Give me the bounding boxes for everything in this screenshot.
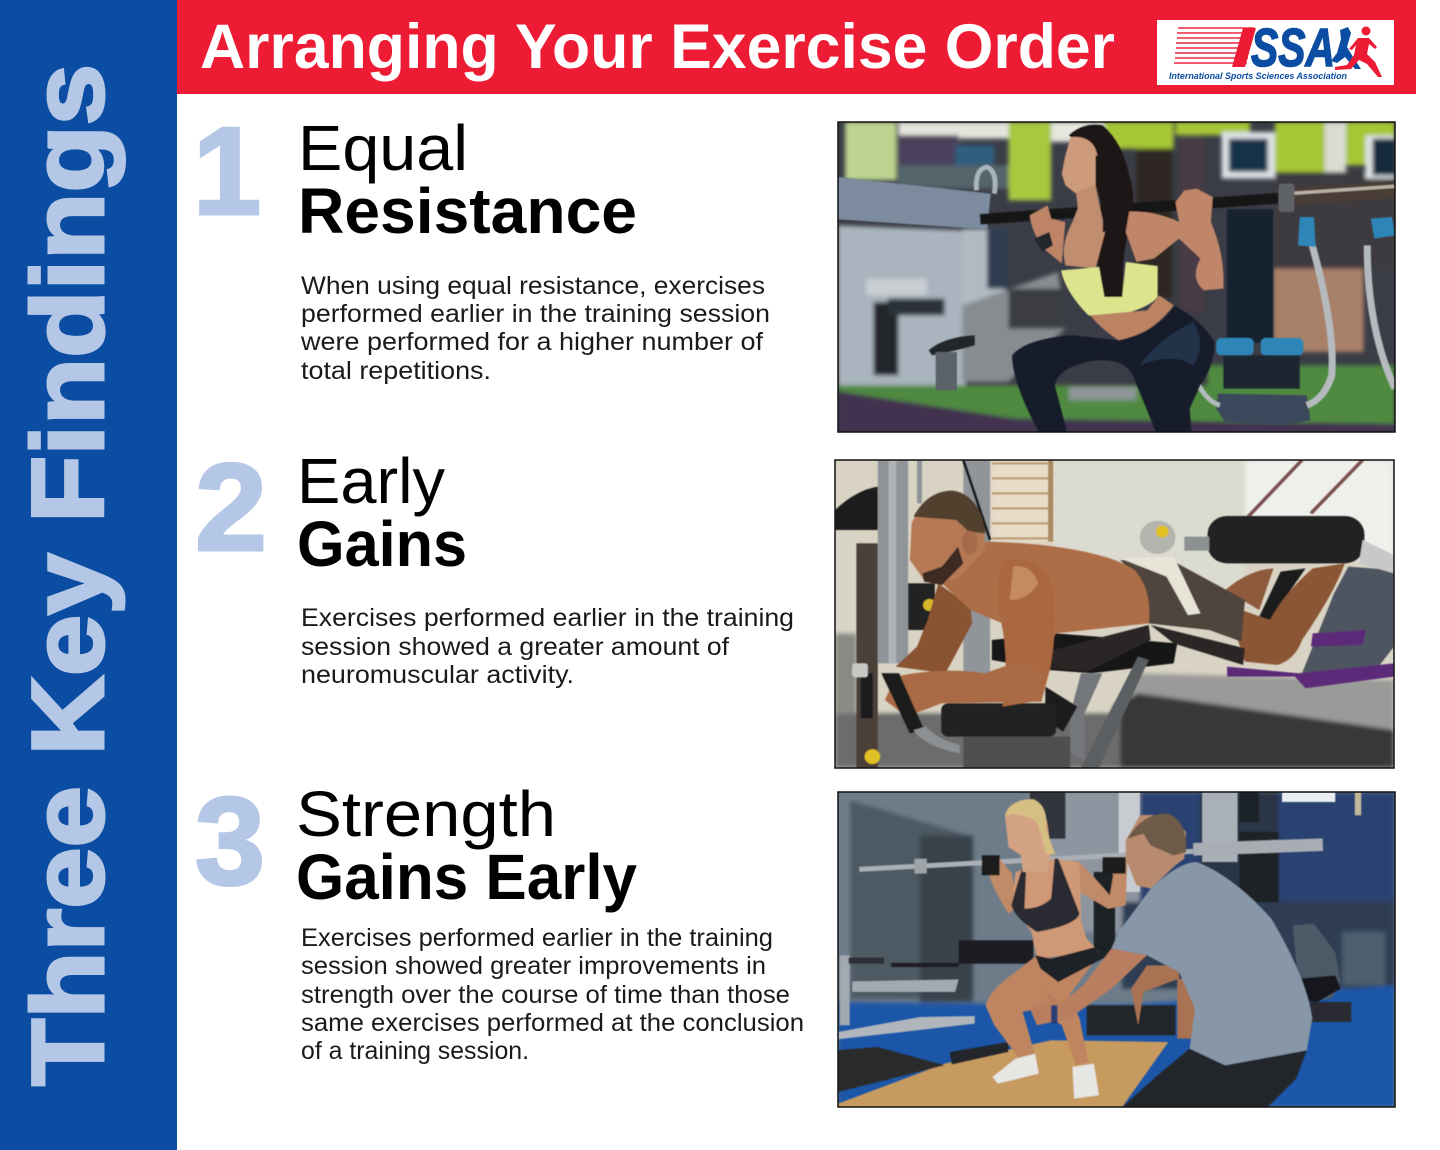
body text 3: strength over the course of time than those (301, 981, 790, 1009)
body text 3: session showed greater improvements in (301, 952, 766, 980)
trainer shirt (1112, 862, 1312, 1065)
heading: Early Gains (297, 445, 467, 580)
far person (1293, 924, 1341, 1002)
left sidebar (0, 0, 177, 1150)
sports top (1011, 859, 1080, 932)
bench (840, 955, 850, 1025)
finding 1 (193, 103, 770, 385)
body text 2: Exercises performed earlier in the training (301, 604, 794, 632)
gym equipment (838, 177, 991, 229)
roller (1208, 516, 1364, 563)
header banner (177, 0, 1416, 94)
photo 1: woman squatting with barbell in gym (838, 122, 1395, 432)
sock (1359, 540, 1394, 573)
body text 1 (300, 272, 770, 385)
barbell (859, 851, 1193, 869)
heading: Early Gains: Gains (297, 508, 467, 580)
heading: Early Gains: Early (297, 445, 445, 517)
woman torso (1012, 859, 1099, 959)
machine frame (856, 543, 878, 768)
pad machine (1302, 567, 1394, 673)
number 2: 2 (195, 439, 267, 577)
floor (838, 1040, 1168, 1107)
yellow top (1061, 262, 1158, 317)
hair (1069, 125, 1133, 299)
wristband (1034, 232, 1053, 251)
trainer other arm (1131, 965, 1179, 1025)
body text 1: performed earlier in the training session (301, 300, 770, 328)
bench (992, 633, 1177, 673)
torso (942, 542, 1149, 647)
trainer arm (1030, 949, 1147, 1025)
shorts (1035, 947, 1103, 982)
barbell (980, 198, 1282, 219)
heading: Equal Resistance: Resistance (298, 175, 637, 247)
body text 2 (301, 604, 794, 689)
body text 3: Exercises performed earlier in the training (301, 924, 773, 952)
upper arm (1000, 590, 1055, 708)
handles (861, 673, 873, 718)
shoes (993, 1054, 1039, 1084)
body text 1: total repetitions. (301, 357, 491, 385)
rack (1119, 792, 1140, 892)
photo 2: man on leg curl machine (835, 460, 1394, 768)
logo: ISSA: International Sports Sciences Association (1169, 71, 1347, 82)
body text 2: session showed a greater amount of (301, 633, 729, 661)
number 3: 3 (195, 773, 265, 911)
body text 1: When using equal resistance, exercises (301, 272, 765, 300)
trainer head (1126, 815, 1186, 889)
body text 3: of a training session. (301, 1037, 529, 1065)
sidebar title: Three Key Findings (11, 64, 125, 1086)
heading: Strength Gains Early: Gains Early (296, 841, 637, 913)
leggings (1012, 305, 1215, 432)
shorts (1120, 560, 1245, 642)
finding 3 (195, 773, 804, 1065)
woman head (1005, 800, 1051, 872)
body text 1: were performed for a higher number of (300, 328, 763, 356)
arms (1030, 205, 1065, 264)
heading: Strength Gains Early: Strength (296, 778, 556, 850)
legs (1225, 568, 1273, 610)
wall bars (992, 463, 1049, 538)
trainer pants (1122, 1049, 1307, 1107)
number 1: 1 (193, 103, 261, 241)
bands (1245, 460, 1302, 520)
face and chest (1062, 137, 1097, 194)
heading: Strength Gains Early (296, 778, 637, 913)
body text 3 (301, 924, 804, 1065)
photo 3: trainer coaching woman squat (838, 792, 1395, 1107)
heading: Equal Resistance (298, 112, 637, 247)
logo: ISSA (1157, 18, 1394, 85)
heading: Equal Resistance: Equal (298, 112, 468, 184)
gloves (982, 855, 1000, 875)
forearm (885, 663, 1042, 717)
head (910, 491, 985, 585)
back forearm (896, 583, 972, 673)
body text 3: same exercises performed at the conclusion (301, 1009, 804, 1037)
body text 2: neuromuscular activity. (301, 661, 574, 689)
title: Arranging Your Exercise Order (200, 12, 1115, 82)
logo: ISSA: SSA (1251, 18, 1335, 78)
woman arms (988, 858, 1014, 914)
midriff (1090, 295, 1174, 340)
finding 2 (195, 439, 794, 689)
woman legs (985, 955, 1094, 1065)
